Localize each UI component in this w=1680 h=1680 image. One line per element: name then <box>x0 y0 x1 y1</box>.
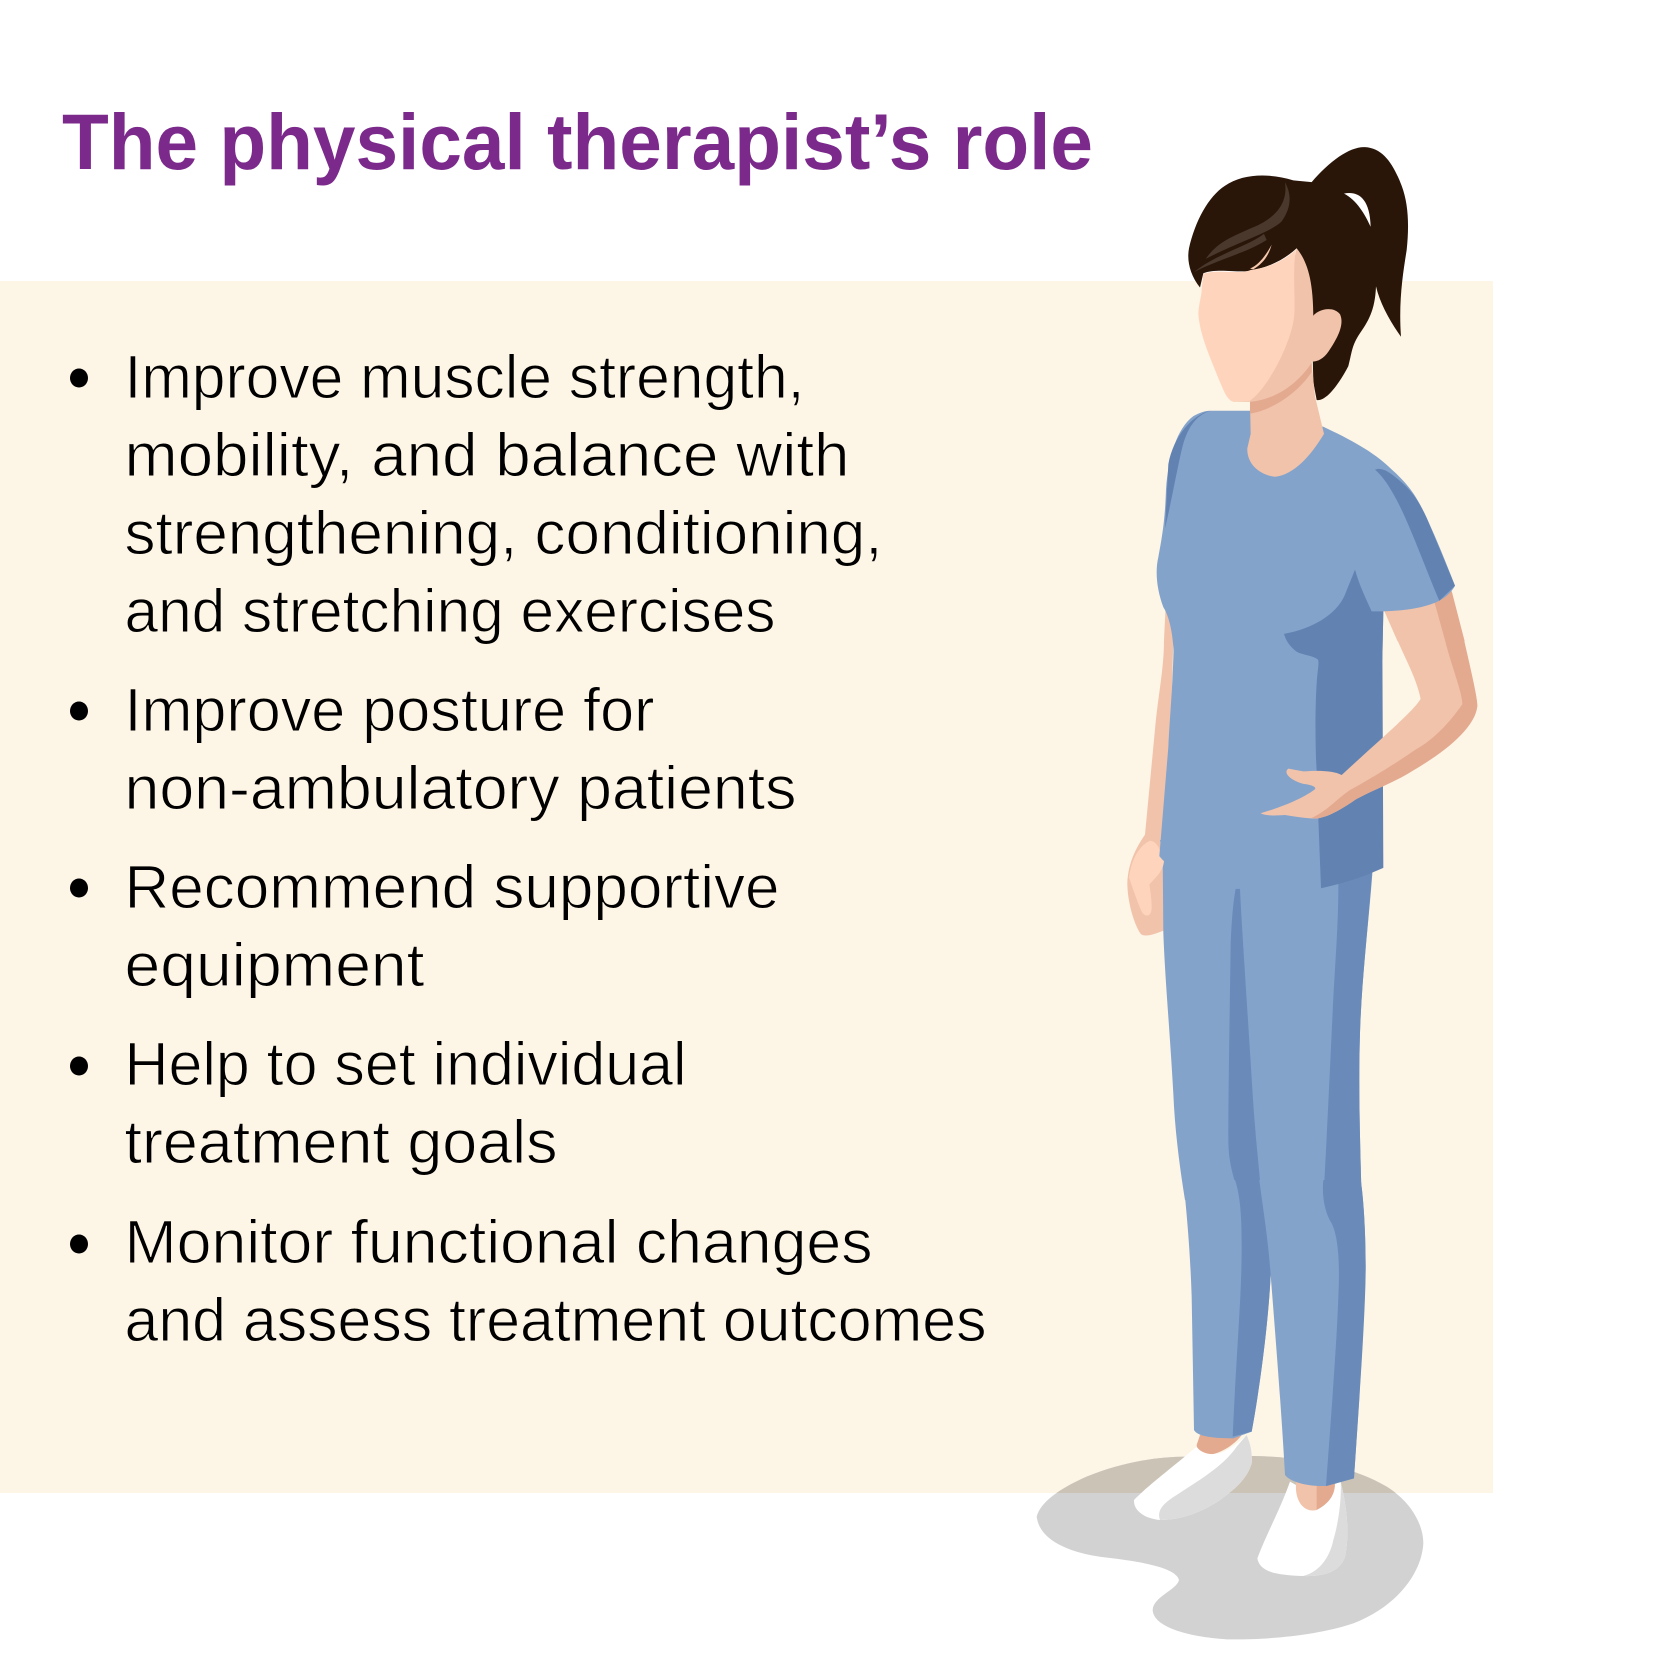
scrub top lower <box>1159 619 1383 888</box>
bullet item: treatment goals <box>70 1030 686 1176</box>
bullet item: muscle strength: and stretching exercises <box>124 577 776 645</box>
bullet item: posture: non-ambulatory patients <box>124 754 796 822</box>
scrub top upper <box>1157 411 1455 660</box>
trousers <box>1160 840 1373 1486</box>
floor shadow over panel <box>1056 1456 1396 1493</box>
right forearm and hand <box>1261 640 1477 819</box>
bullet item: supportive equipment: equipment <box>124 931 425 999</box>
bullet item: supportive equipment: Recommend supportive <box>124 853 779 921</box>
right upper arm <box>1383 591 1465 641</box>
left hand highlight <box>1129 841 1164 916</box>
bullet item: monitor changes: Monitor functional changes <box>124 1208 872 1276</box>
bullet item: posture <box>70 676 796 822</box>
illustration: physical therapist figure <box>1037 147 1477 1639</box>
bullet item: treatment goals: treatment goals <box>124 1108 558 1176</box>
bullet item: muscle strength <box>70 343 882 645</box>
ankles <box>1197 1435 1335 1511</box>
neck and ear <box>1247 309 1342 477</box>
panel: cream background <box>0 281 1493 1493</box>
left arm and hand base <box>1127 606 1177 936</box>
hair <box>1188 147 1408 400</box>
floor shadow <box>1037 1456 1423 1639</box>
head <box>1198 245 1313 402</box>
bullet list <box>70 343 986 1354</box>
bullet item: muscle strength: strengthening, conditioning, <box>124 499 882 567</box>
bullet item: supportive equipment <box>70 853 779 999</box>
bullet item: monitor changes: and assess treatment outcomes <box>124 1286 986 1354</box>
bullet item: muscle strength: Improve muscle strength, <box>124 343 804 411</box>
bullet item: treatment goals: Help to set individual <box>124 1030 686 1098</box>
bullet item: muscle strength: mobility, and balance with <box>124 421 850 489</box>
bullet item: monitor changes <box>70 1208 986 1354</box>
shoes <box>1134 1435 1347 1576</box>
title: The physical therapist’s role <box>62 97 1093 186</box>
bullet item: posture: Improve posture for <box>124 676 654 744</box>
